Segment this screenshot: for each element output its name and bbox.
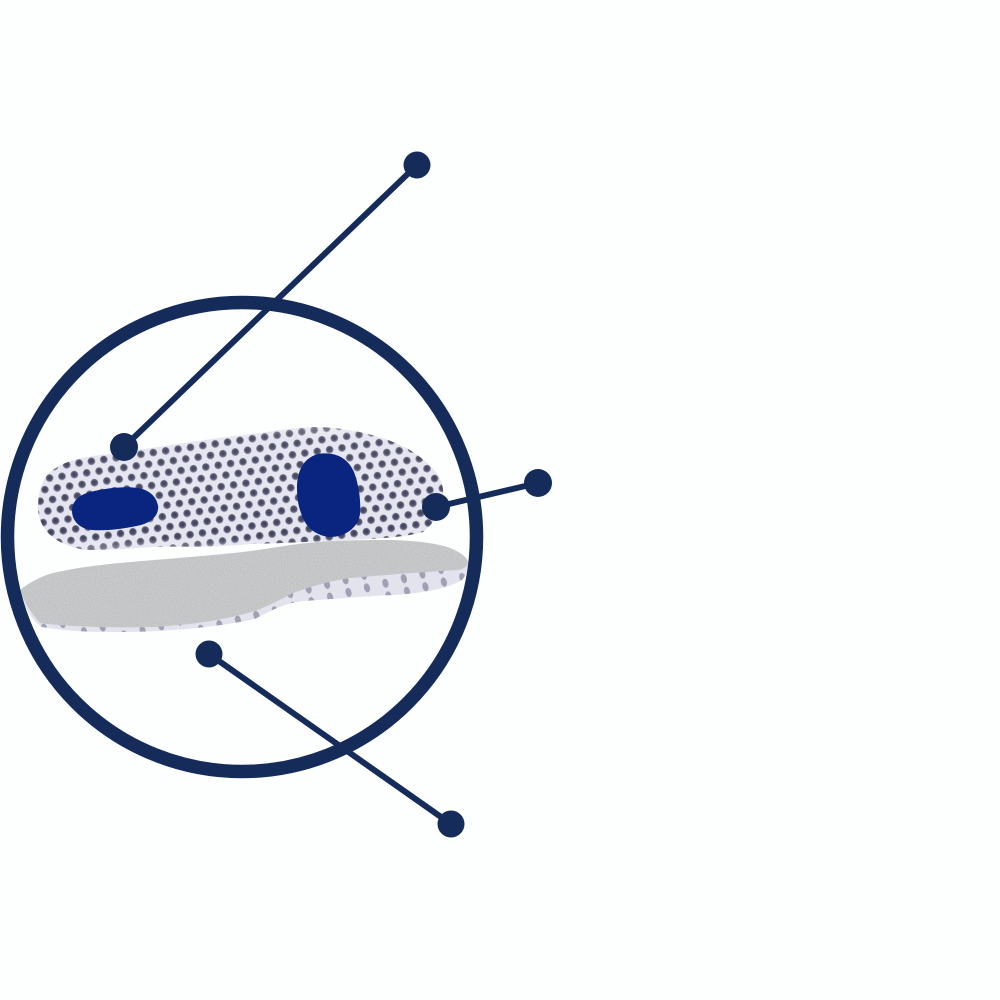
lower insole: [20, 540, 468, 632]
forefoot pad: [297, 453, 360, 537]
honeycomb mesh: [38, 427, 444, 550]
lower insole grey top: [20, 540, 468, 627]
upper insole: [38, 427, 444, 550]
callout: right: [422, 469, 552, 521]
ring: [8, 302, 476, 772]
callout: top: [110, 152, 430, 461]
lower insole foam edge: [20, 560, 468, 632]
heel pad: [72, 487, 158, 530]
callout: bottom: [196, 640, 464, 838]
